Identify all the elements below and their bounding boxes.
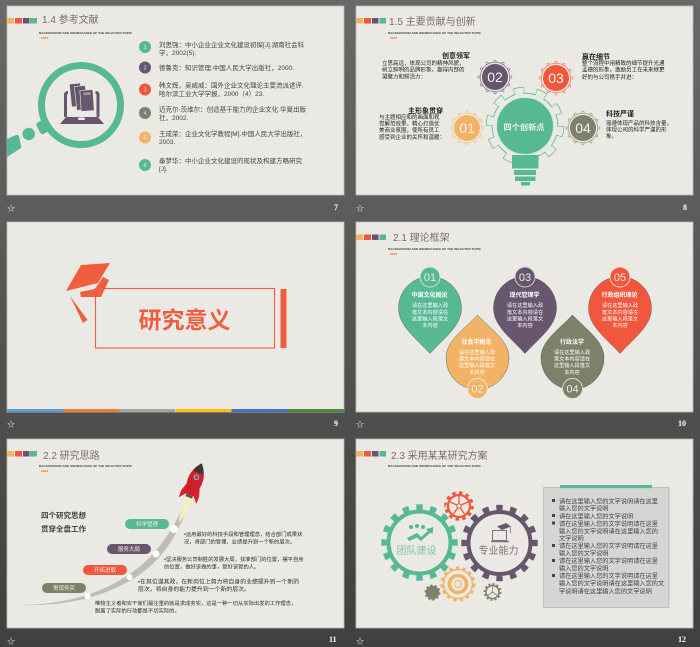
panel: slide 12 research plan: [356, 439, 693, 646]
drop 02: 落文本内容请在: [459, 354, 495, 362]
paragraph 1: •运用最好的科技手段和管理理念，结合部门成果状: [184, 530, 303, 538]
drop 04: 行政法学: [560, 338, 584, 346]
gear 01: 01: [459, 120, 475, 136]
drop 05: 这里输入段落文: [602, 314, 639, 322]
panel: slide 11 research approach: [7, 439, 344, 646]
text: 科技严谨: 瑶遵体现产品的科技含量，: [606, 119, 672, 127]
reference 5: 2003.: [159, 139, 175, 146]
text: 赢在细节: 好的与公司携手并进：: [582, 73, 637, 81]
text: 科技严谨: [606, 109, 672, 140]
orange gear: [442, 568, 474, 600]
page number: 7: [334, 203, 338, 212]
purple gear: professional: [464, 508, 534, 578]
paragraph 2: 的位置，做好该做的事，管好该管的人。: [164, 562, 259, 570]
reference 2: 德鲁克：知识管理.中国人民大学出版社，2000.: [159, 63, 294, 72]
drop 03: 现代管理学: [509, 291, 540, 299]
drop 05: 落文本内容请在: [602, 308, 638, 316]
milestone 2: 服务大局: [118, 545, 140, 553]
paragraph 3: •在其位谋其政，在新岗位上努力将自身的业绩提升到一个新的: [138, 578, 299, 586]
heading text: [41, 510, 86, 534]
lightbulb gear: [489, 90, 561, 186]
panel: slide 9 section title: [7, 222, 344, 429]
subtitle: BACKGROUND AND SIGNIFICANCE OF THE SELECTED TOPIC: [388, 31, 482, 35]
reference 4: 社，2002.: [159, 113, 188, 122]
text: 创意领军: [382, 51, 470, 80]
text: 赢在细节: 赢在细节: [582, 52, 610, 61]
title: 1.5 主要贡献与创新: [389, 15, 476, 28]
header colour squares: [356, 234, 386, 240]
text: 科技严谨: 象。: [606, 132, 617, 140]
gear 01: [451, 112, 483, 144]
header colour squares: [356, 451, 386, 456]
milestone 3: [83, 565, 132, 580]
growth curve: [22, 511, 185, 605]
drop 02: 请在这里输入政: [459, 348, 496, 356]
bullet list: 请在这里输入您的文字说明请在这里: [559, 572, 658, 580]
milestone 1: [125, 519, 178, 533]
bullet list: 输入您的文字说明: [559, 564, 608, 572]
panel: slide 7 references: [7, 6, 344, 213]
milestone 2: [107, 544, 160, 558]
drop 05: 行政组织理论: [601, 291, 638, 299]
drop 04: 本内容: [564, 368, 580, 376]
green gear: team: [384, 508, 454, 578]
reference 5: 王成荣：企业文化学教程[M].中国人民大学出版社，: [159, 129, 306, 138]
drop 05: 请在这里输入政: [602, 301, 639, 309]
bullet list: [552, 498, 664, 596]
milestone 4: 寄现务实: [53, 584, 75, 592]
title: 2.1 理论框架: [393, 231, 450, 244]
text: 科技严谨: 科技严谨: [606, 109, 634, 118]
star icon: ☆: [356, 637, 364, 646]
reference 5: 5: [143, 136, 147, 142]
drop 02: 社会学概论: [461, 338, 492, 346]
reference 6: 6: [143, 163, 147, 169]
reference 1: 刘思强：中小企业企业文化建设初探[J].湖南社会科: [159, 40, 305, 49]
text: 赢在细节: [582, 52, 665, 81]
bullet list: 输入您的文字说明请在这里输入您的文: [559, 580, 664, 588]
gear 04: 04: [575, 120, 591, 136]
reference 2: 2: [143, 66, 147, 72]
grey solid gear: [426, 586, 440, 600]
text: 主形象贯穿: 感受到企业的关怀和温暖：: [379, 133, 445, 141]
bullet list: 字说明请在这里输入您的文字说明: [559, 588, 652, 596]
reference 1: [139, 40, 305, 57]
title box: 研究意义: [138, 307, 230, 333]
text: 主形象贯穿: 美商业氛围，使所有员工: [379, 126, 440, 134]
paragraph 1: 况，将部门的管理、业绩提升到一个新的层次。: [184, 538, 295, 546]
milestone 1: 科学管理: [136, 520, 158, 528]
text: 赢在细节: 孟德的形象，激励员工在未来继更: [582, 66, 665, 74]
drop 01: 请在这里输入政: [412, 301, 449, 309]
bullet list: 文字说明: [559, 534, 584, 542]
text: 创意领军: 创意领军: [442, 51, 470, 60]
text: 创意领军: 凝聚力和鲜活力：: [382, 72, 426, 80]
title: 1.4 参考文献: [42, 13, 99, 26]
gear 03: [540, 62, 572, 94]
text: 主形象贯穿: 主形象贯穿: [408, 106, 443, 115]
gear 02: 02: [487, 69, 503, 85]
star icon: ☆: [7, 420, 15, 429]
icon: graduation cap: [66, 263, 110, 323]
reference 3: 3: [143, 88, 147, 94]
drop 02: 这里输入段落文: [459, 361, 496, 369]
bullet list: 输入您的文字说明: [559, 504, 608, 512]
drop 04: 04: [566, 384, 579, 396]
red gear: [446, 493, 472, 519]
text: 创意领军: 树立鲜明的品牌形象，赢得内部的: [382, 66, 465, 74]
icon: laptop and cap: [491, 523, 511, 542]
subtitle: BACKGROUND AND SIGNIFICANCE OF THE SELECTED TOPIC: [388, 247, 482, 251]
reference 4: [139, 104, 306, 122]
paragraph 1: [184, 530, 303, 546]
icon: team and arrow: [407, 524, 434, 541]
drop 05: 本内容: [612, 321, 628, 329]
gear 02: [479, 61, 511, 93]
icon: magnifier with laptop and books: [7, 66, 120, 157]
drop 03: 落文本内容请在: [507, 308, 543, 316]
page number: 8: [683, 203, 687, 212]
reference 3: 哈尔滨工业大学学报，2000（4）23.: [159, 89, 264, 98]
reference 6: [139, 156, 302, 173]
drop 04: 这里输入段落文: [554, 361, 591, 369]
gear 04: [567, 112, 599, 144]
bullet list: 请在这里输入您的文字说明: [559, 512, 633, 520]
star icon: ☆: [7, 204, 15, 213]
drop 05: [588, 267, 652, 354]
paragraph 2: •坚决服务公司制胜的发展大局，找准部门的位置，摆平自身: [164, 555, 304, 563]
reference 2: [139, 62, 294, 74]
drop 05: 05: [614, 272, 626, 284]
header colour squares: [7, 451, 37, 456]
reference 3: [139, 80, 304, 98]
reference 1: 学，2002(5).: [159, 48, 196, 57]
grey outline gear: [484, 584, 500, 600]
drop 03: 请在这里输入政: [507, 301, 544, 309]
bullet list: 请在这里输入您的文字说明请在这里: [559, 557, 658, 565]
bullet list: 请在这里输入您的文字说明请在这里: [559, 542, 658, 550]
drop 03: 03: [519, 272, 531, 284]
page number: 9: [334, 419, 338, 428]
title: 2.2 研究思路: [43, 449, 100, 462]
drop 01: 中国文化概论: [411, 291, 448, 299]
reference 6: 秦梦华：中小企业文化建设的现状及构建方略研究: [159, 156, 302, 165]
drop 01: 这里输入段落文: [412, 314, 449, 322]
drop 01: 01: [424, 272, 436, 284]
bottom colour stripe: [7, 409, 344, 412]
text: 主形象贯穿: 觉解范效果，精心打造优: [379, 120, 440, 128]
text: 主形象贯穿: [379, 106, 445, 141]
heading text: 贯穿全盘工作: [41, 524, 86, 534]
title: 2.3 采用某某研究方案: [391, 449, 488, 462]
drop 01: 落文本内容请在: [412, 308, 448, 316]
page number: 11: [329, 635, 337, 644]
subtitle: BACKGROUND AND SIGNIFICANCE OF THE SELECTED TOPIC: [39, 31, 133, 35]
reference 6: [J].: [159, 166, 168, 173]
icon: rocket: [178, 460, 211, 523]
reference 5: [139, 129, 306, 146]
star icon: ☆: [356, 420, 364, 429]
gear 03: 03: [548, 70, 564, 86]
drop 03: 这里输入段落文: [507, 314, 544, 322]
title box: [96, 288, 286, 348]
text panel: [544, 485, 669, 608]
reference 4: 4: [143, 111, 147, 117]
milestone 3: 开拓进取: [94, 566, 116, 574]
paragraph 3: 层次，将自身的能力提升到一个新的层次。: [138, 585, 250, 593]
header colour squares: [356, 18, 386, 24]
reference 4: 迈克尔·茨维尔：创造基于能力的企业文化.华夏出版: [159, 104, 306, 114]
drop 02: [446, 315, 509, 398]
panel: slide 10 theory framework: [356, 222, 693, 429]
bullet list: 请在这里输入您的文字说明请在这里: [559, 520, 658, 528]
subtitle: BACKGROUND AND SIGNIFICANCE OF THE SELECTED TOPIC: [39, 464, 133, 468]
paragraph 4: 唯物主义者和实干家们最注重的就是求成务实，这是一种一切从实际出发的工作理念，: [95, 599, 296, 607]
drop 02: 本内容: [469, 368, 485, 376]
heading text: 四个研究思想: [41, 510, 86, 520]
drop 04: 请在这里输入政: [554, 348, 591, 356]
bullet list: 输入您的文字说明: [559, 550, 608, 558]
reference 3: 韩文辉，吴威威：国外企业文化理论主要流派述评.: [159, 80, 304, 90]
center label: 四个创新点: [504, 122, 544, 132]
drop 04: [541, 315, 604, 398]
bullet list: 输入您的文字说明请在这里输入您的: [559, 528, 658, 536]
paragraph 4: [95, 599, 296, 614]
drop 03: [494, 267, 556, 354]
milestone 4: [42, 583, 90, 599]
paragraph 2: [164, 555, 304, 570]
page number: 10: [678, 419, 686, 428]
reference 1: 1: [143, 45, 147, 51]
page number: 12: [678, 635, 686, 644]
star icon: ☆: [356, 204, 364, 213]
label: 专业能力: [478, 544, 518, 557]
paragraph 4: 脱离了实际的行动都是不切实际的。: [95, 606, 180, 614]
subtitle: BACKGROUND AND SIGNIFICANCE OF THE SELECTED TOPIC: [388, 464, 482, 468]
panel: slide 8 contributions: [356, 6, 693, 213]
bullet list: 请在这里输入您的文字说明请在这里: [559, 498, 658, 506]
text: 赢在细节: 整个流程中用精致的细节提升光通: [582, 59, 665, 67]
drop 02: 02: [471, 384, 484, 396]
text: 创意领军: 立思高远，体现公司的精神风貌，: [382, 59, 465, 67]
header colour squares: [7, 18, 37, 24]
text: 主形象贯穿: 与主题相应和的画面和视: [379, 113, 440, 121]
text: 科技严谨: 体现公司的科学严谨的形: [606, 126, 667, 134]
drop 01: [398, 267, 462, 354]
drop 01: 本内容: [422, 321, 438, 329]
paragraph 3: [138, 578, 299, 593]
drop 04: 落文本内容请在: [554, 354, 590, 362]
star icon: ☆: [7, 637, 15, 646]
label: 团队建设: [396, 544, 436, 557]
drop 03: 本内容: [517, 321, 533, 329]
